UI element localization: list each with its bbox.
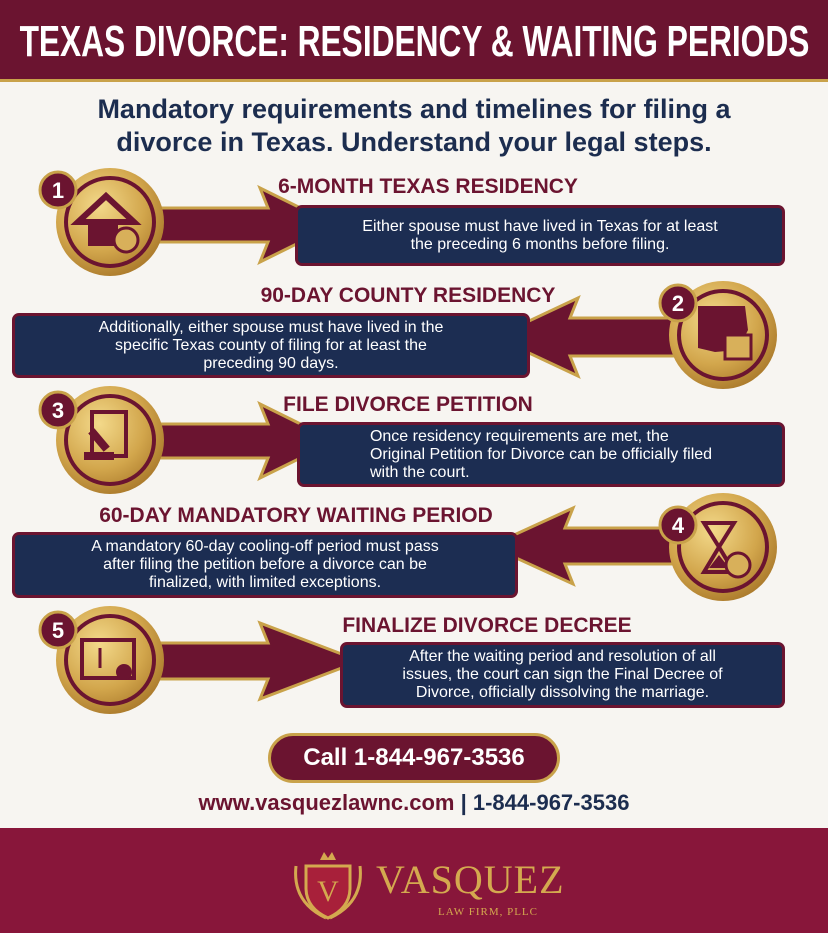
- call button: Call 1-844-967-3536: [303, 744, 525, 771]
- website line: www.vasquezlawnc.com | 1-844-967-3536: [199, 790, 629, 815]
- icon: hourglass (4): 4: [672, 513, 685, 538]
- arrow: step 3: [158, 404, 335, 478]
- icon: map calendar (2): 2: [672, 291, 684, 316]
- text box 3: Original Petition for Divorce can be officially filed: [370, 446, 712, 462]
- footer with logo: LAW FIRM, PLLC: [438, 906, 538, 918]
- text box 3: with the court.: [370, 464, 470, 480]
- text box 4: after filing the petition before a divorce can be: [103, 556, 427, 573]
- logo emblem: V: [317, 875, 339, 908]
- title: [0, 0, 828, 82]
- icon: house clock (1): [40, 168, 164, 276]
- icon: house clock (1): 1: [52, 178, 64, 203]
- text box 3: Once residency requirements are met, the: [370, 428, 669, 444]
- heading 3: FILE DIVORCE PETITION: [283, 393, 533, 416]
- text box 5: [340, 642, 785, 708]
- text box 4: [12, 532, 518, 598]
- heading 1: 6-MONTH TEXAS RESIDENCY: [278, 175, 578, 198]
- icon: decree certificate (5): [40, 606, 164, 714]
- subtitle: Mandatory requirements and timelines for filing a: [97, 94, 731, 124]
- logo emblem: [294, 852, 362, 920]
- arrow: step 5: [158, 623, 360, 699]
- text box 2: preceding 90 days.: [203, 354, 339, 372]
- arrow: step 1: [158, 188, 335, 262]
- text box 2: Additionally, either spouse must have lived in the: [99, 318, 443, 336]
- text box 4: A mandatory 60-day cooling-off period must pass: [91, 538, 439, 555]
- logo text: VASQUEZ: [376, 857, 565, 902]
- text box 3: [297, 422, 785, 487]
- text box 5: Divorce, officially dissolving the marriage.: [416, 684, 709, 701]
- text box 1: [295, 205, 785, 266]
- text box 1: the preceding 6 months before filing.: [411, 236, 669, 252]
- call button: [268, 733, 560, 783]
- title: TEXAS DIVORCE: RESIDENCY & WAITING PERIODS: [19, 17, 809, 66]
- icon: hourglass (4): [660, 493, 777, 601]
- text box 4: finalized, with limited exceptions.: [149, 574, 381, 591]
- text box 2: [12, 313, 530, 378]
- text box 5: issues, the court can sign the Final Decree of: [402, 666, 723, 683]
- icon: map calendar (2): [660, 281, 777, 389]
- heading 5: FINALIZE DIVORCE DECREE: [342, 614, 632, 637]
- text box 2: specific Texas county of filing for at least the: [115, 336, 427, 354]
- icon: gavel document (3): 3: [52, 398, 64, 423]
- subtitle: [97, 94, 731, 157]
- icon: decree certificate (5): 5: [52, 618, 64, 643]
- heading 2: 90-DAY COUNTY RESIDENCY: [261, 284, 555, 307]
- arrow: step 4: [490, 508, 675, 584]
- icon: gavel document (3): [40, 386, 164, 494]
- footer with logo: [0, 828, 828, 933]
- arrow: step 2: [495, 298, 680, 376]
- text box 5: After the waiting period and resolution of all: [409, 648, 716, 665]
- text box 1: Either spouse must have lived in Texas for at least: [362, 218, 718, 234]
- heading 4: 60-DAY MANDATORY WAITING PERIOD: [99, 504, 493, 527]
- subtitle: divorce in Texas. Understand your legal steps.: [116, 127, 712, 157]
